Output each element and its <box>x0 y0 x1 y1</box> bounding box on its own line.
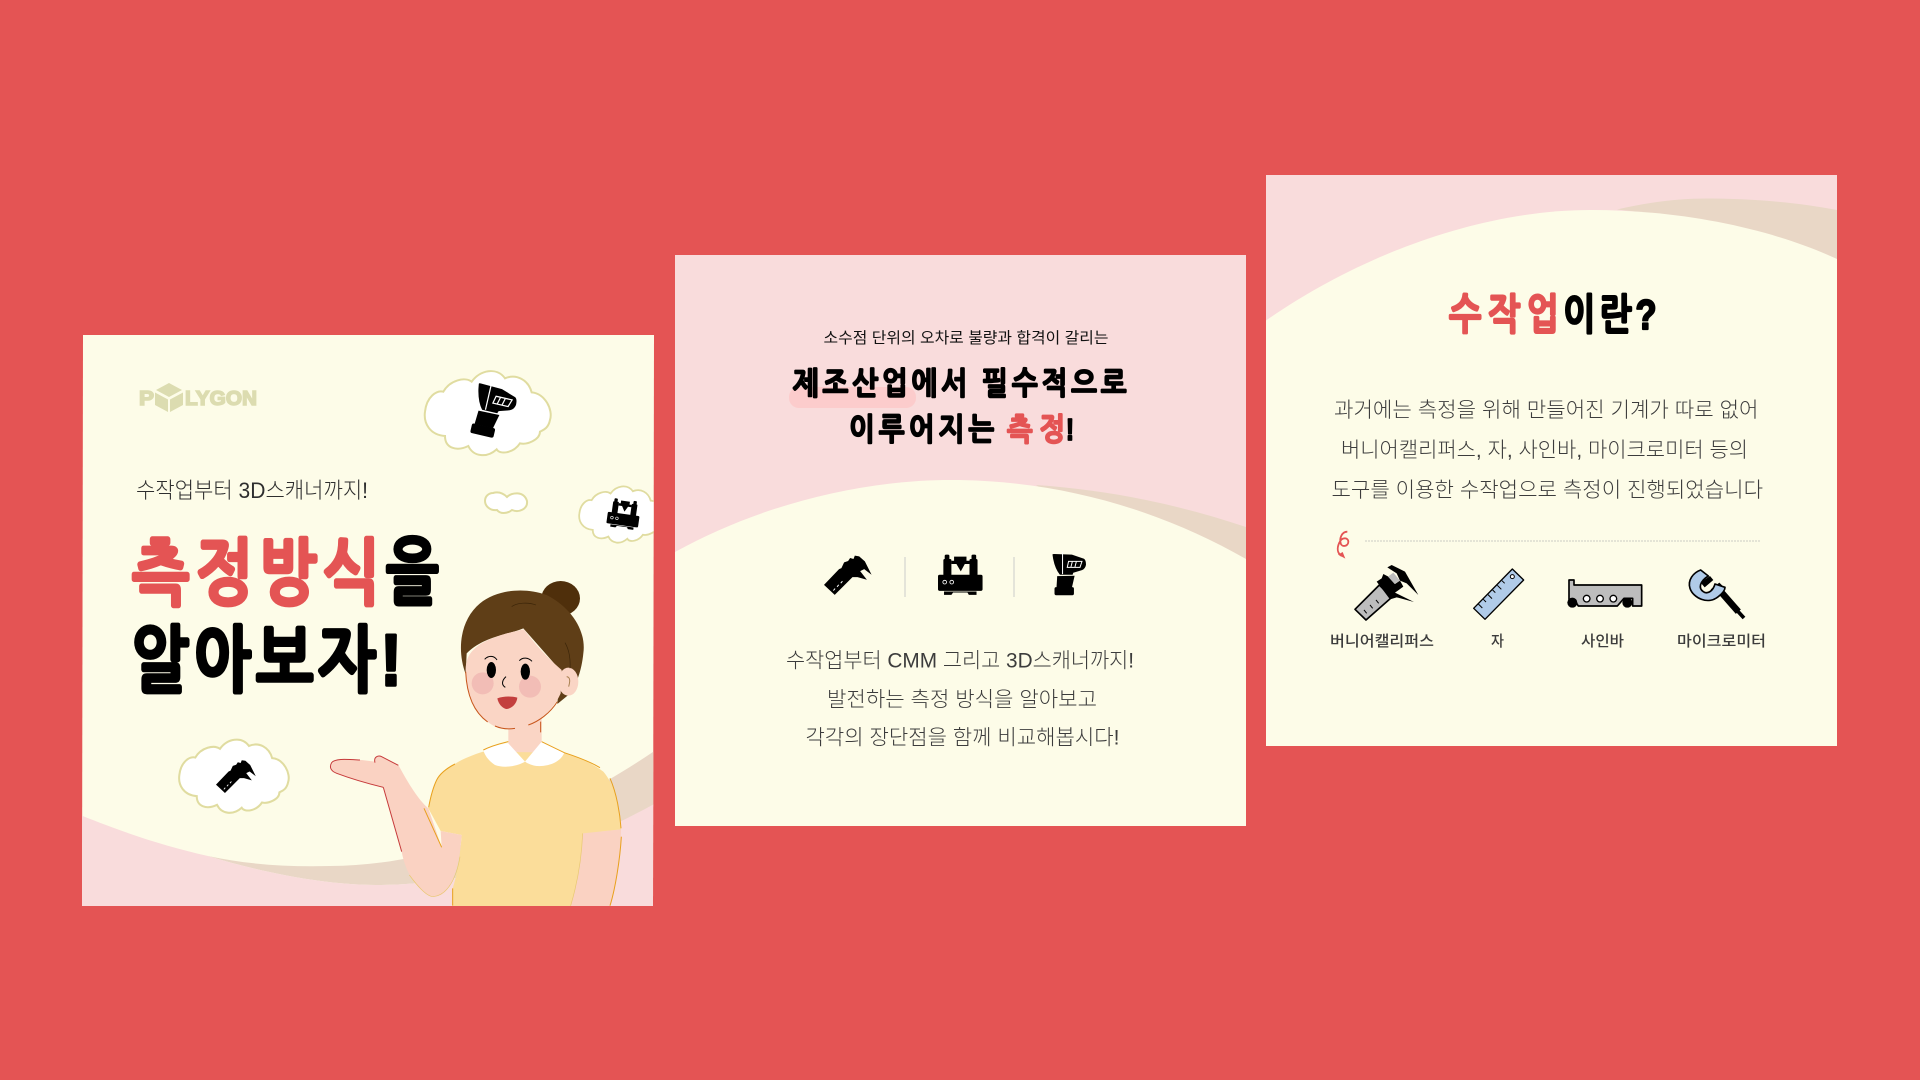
hair <box>461 590 584 704</box>
tool: sine bar <box>1567 580 1642 650</box>
logo: POLYGON: LYGON <box>185 388 257 410</box>
heading: 수작업 <box>1449 292 1559 339</box>
title line 2: 알아보자! <box>131 621 401 701</box>
collar <box>483 742 564 767</box>
body text: 과거에는 측정을 위해 만들어진 기계가 따로 없어 <box>1334 399 1758 422</box>
hair bun <box>541 581 580 616</box>
subtitle: 수작업부터 3D스캐너까지! <box>136 478 368 503</box>
body text <box>786 650 1134 750</box>
tool: micrometer <box>1677 570 1766 650</box>
eyes <box>487 662 496 678</box>
beige wave <box>1036 485 1246 562</box>
cream wave <box>1266 210 1837 746</box>
label: 자 <box>1491 633 1504 650</box>
body text: 발전하는 측정 방식을 알아보고 <box>827 688 1097 712</box>
icon: CMM <box>606 498 640 530</box>
tool: vernier caliper <box>1330 565 1434 650</box>
body text: 버니어캘리퍼스, 자, 사인바, 마이크로미터 등의 <box>1341 439 1748 462</box>
icon: caliper <box>824 556 872 595</box>
body text: 도구를 이용한 수작업으로 측정이 진행되었습니다 <box>1332 479 1763 502</box>
right arm <box>570 829 621 907</box>
outlines <box>330 756 402 852</box>
beige wave <box>1617 198 1837 262</box>
pink wave <box>80 803 656 907</box>
heading line 2 <box>850 413 1072 444</box>
panel: measuring methods cover <box>80 335 663 907</box>
cloud with CMM <box>579 486 663 543</box>
panel: what is manual work <box>1266 175 1837 746</box>
label: 마이크로미터 <box>1677 633 1766 650</box>
heading line 1: 제조산업에서 필수적으로 <box>793 367 1127 401</box>
face <box>466 629 562 729</box>
highlight <box>789 387 916 408</box>
label: 사인바 <box>1581 633 1624 650</box>
icon: caliper <box>216 760 256 793</box>
body text: 수작업부터 CMM 그리고 3D스캐너까지! <box>786 650 1134 672</box>
mouth <box>497 696 517 709</box>
icon: 3D scanner <box>1052 552 1086 595</box>
heading <box>1449 292 1656 339</box>
lead text: 소수점 단위의 오차로 불량과 합격이 갈리는 <box>824 329 1108 347</box>
icon: 3D scanner <box>470 383 516 438</box>
shirt <box>428 752 621 907</box>
title line 1: 을 <box>386 533 439 614</box>
body text <box>1332 399 1763 502</box>
small cloud <box>485 492 527 513</box>
beige wave <box>208 750 656 885</box>
icon: red squiggle arrow <box>1338 532 1348 559</box>
tool: ruler <box>1474 569 1524 650</box>
title line 1: 측정방식 <box>132 534 380 614</box>
cloud with caliper <box>179 740 289 813</box>
left arm and hand <box>331 756 462 896</box>
logo: POLYGON: P <box>139 388 154 410</box>
heading line 2: 이루어지는 <box>849 413 994 447</box>
character illustration <box>330 581 621 907</box>
body text: 각각의 장단점을 함께 비교해봅시다! <box>806 726 1120 750</box>
logo: POLYGON <box>139 383 257 412</box>
label: 버니어캘리퍼스 <box>1330 633 1434 650</box>
cloud with scanner <box>425 371 551 455</box>
ear <box>558 668 578 696</box>
heading line 2: ! <box>1066 412 1074 447</box>
neck <box>508 718 542 752</box>
panel: importance of measurement <box>675 255 1246 826</box>
heading line 2: 측정 <box>1007 413 1065 447</box>
heading: 이란? <box>1563 292 1656 339</box>
cream wave <box>675 480 1246 826</box>
cheeks <box>472 672 494 694</box>
icon: CMM <box>938 555 983 595</box>
